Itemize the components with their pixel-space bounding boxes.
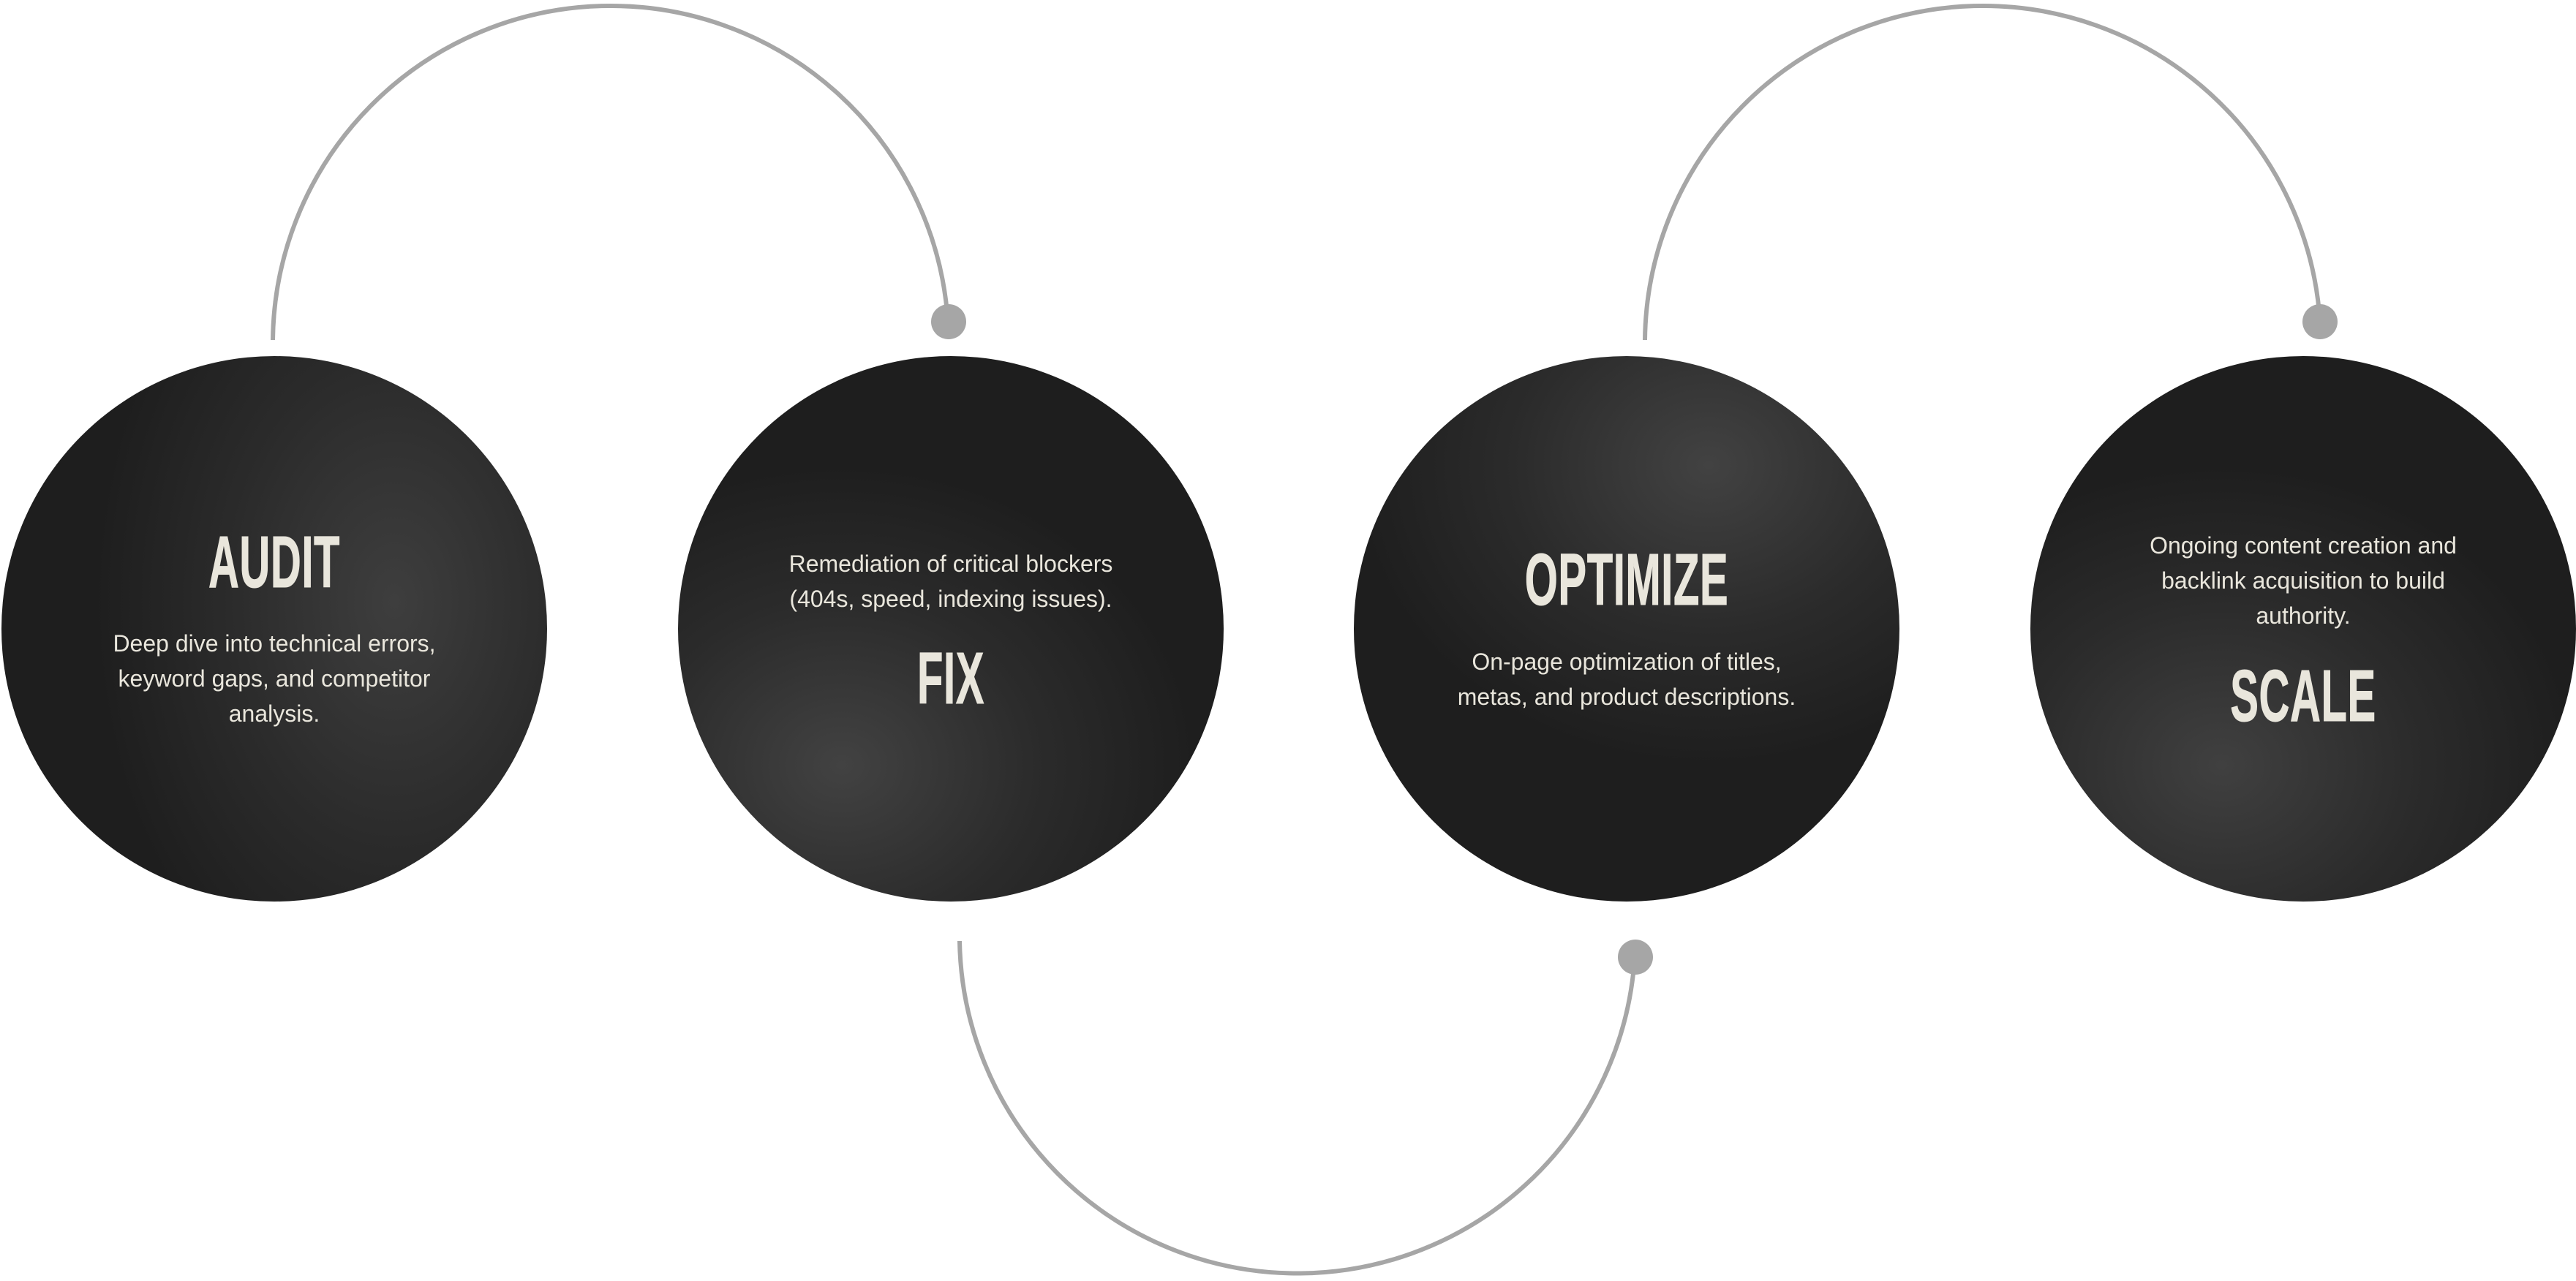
text: optimize description: On-page optimization of titles, bbox=[1472, 649, 1782, 675]
heading: AUDIT: AUDIT bbox=[208, 521, 340, 603]
text: optimize description bbox=[1458, 649, 1796, 710]
heading: SCALE: SCALE bbox=[2230, 655, 2376, 737]
text: fix description: Remediation of critical blockers bbox=[789, 551, 1112, 577]
text: audit description: keyword gaps, and competitor bbox=[118, 665, 430, 692]
circle: scale bbox=[2030, 356, 2576, 902]
text: audit description bbox=[113, 630, 436, 727]
text: fix description: (404s, speed, indexing issues). bbox=[789, 586, 1112, 612]
text: scale description: authority. bbox=[2256, 602, 2351, 629]
text: optimize description: metas, and product descriptions. bbox=[1458, 684, 1796, 710]
text: audit description: Deep dive into technical errors, bbox=[113, 630, 436, 657]
circle: fix bbox=[678, 356, 1224, 902]
arc: optimize to scale bbox=[1645, 6, 2338, 340]
text: scale description: Ongoing content creation and bbox=[2150, 532, 2457, 559]
circle: optimize bbox=[1354, 356, 1899, 902]
text: scale description: backlink acquisition to build bbox=[2161, 567, 2445, 594]
arc: fix to optimize bbox=[960, 940, 1653, 1274]
text: scale description bbox=[2150, 532, 2457, 629]
arc: audit to fix bbox=[273, 6, 966, 340]
circle: audit bbox=[1, 356, 547, 902]
text: fix description bbox=[789, 551, 1112, 612]
heading: FIX: FIX bbox=[917, 638, 984, 719]
text: audit description: analysis. bbox=[229, 700, 320, 727]
heading: OPTIMIZE: OPTIMIZE bbox=[1525, 539, 1728, 621]
